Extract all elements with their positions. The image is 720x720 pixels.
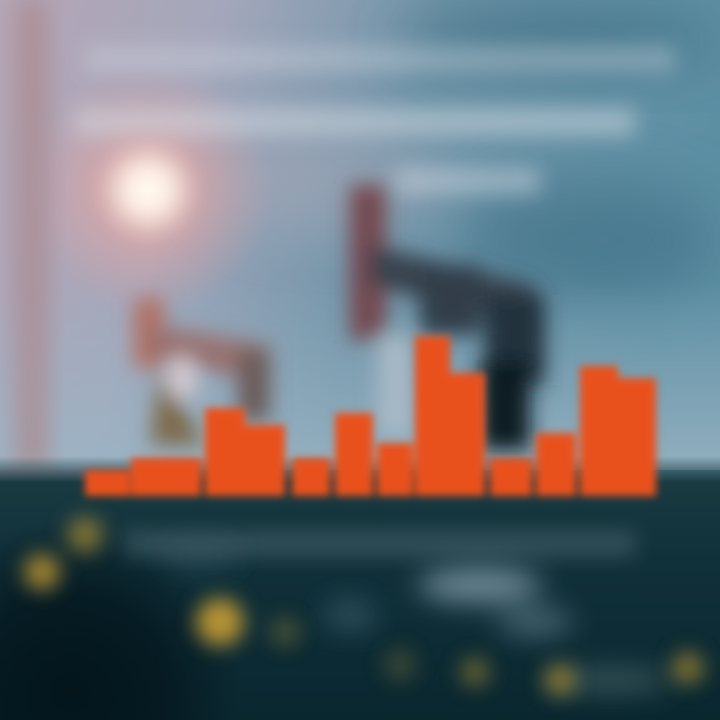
left pole: [14, 0, 50, 470]
title: blurred headline lines: [75, 46, 675, 194]
yellow lights: [24, 517, 704, 696]
bar chart: orange bars: [85, 336, 656, 496]
dark ground corner: [0, 520, 240, 720]
light reflections on ground: [160, 543, 672, 690]
sun glow: [23, 65, 273, 315]
small pump jack: [134, 298, 270, 445]
large pump jack: [350, 185, 545, 450]
caption: blurred text line under chart: [125, 532, 635, 556]
ground: [0, 456, 720, 720]
sky background: [0, 0, 720, 490]
